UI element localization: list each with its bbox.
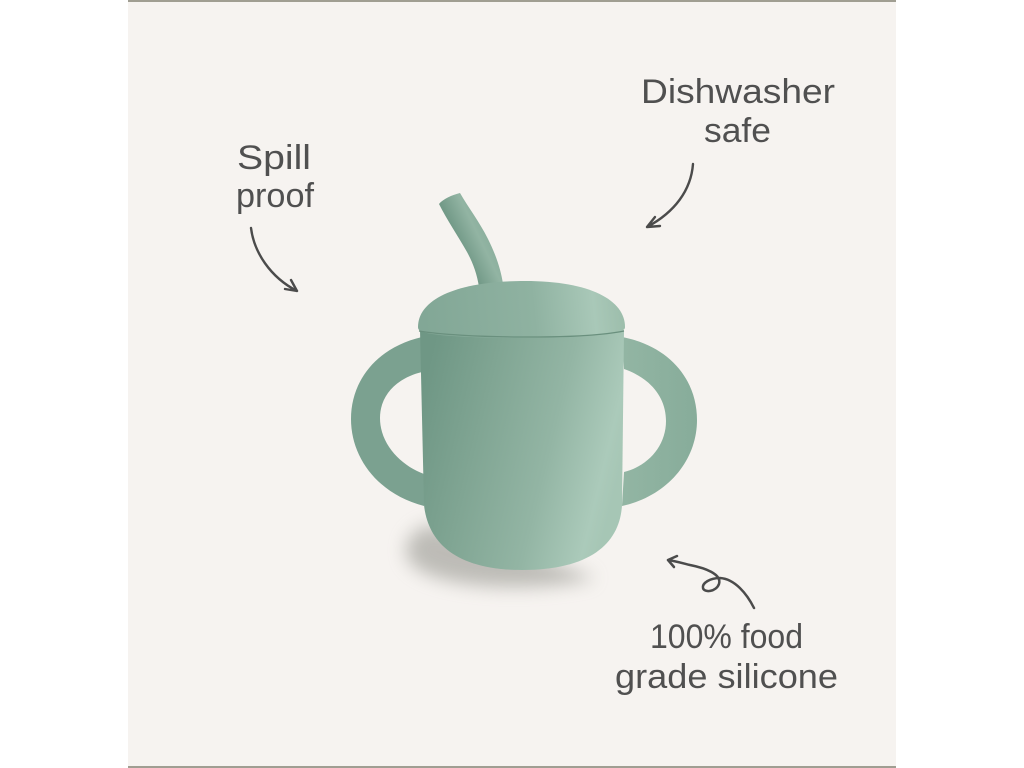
arrow: food grade silicone	[668, 556, 754, 608]
label: Dishwasher safe	[641, 73, 835, 150]
lid seam	[419, 331, 624, 337]
label: Dishwasher safe: Dishwasher	[641, 73, 835, 111]
label: Dishwasher safe: safe	[704, 112, 771, 150]
label: 100% food grade silicone	[615, 618, 838, 696]
straw	[439, 193, 503, 287]
arrow: Dishwasher safe	[647, 164, 693, 227]
lid	[418, 281, 625, 338]
product: two-handled sippy cup with straw	[351, 193, 697, 587]
label: 100% food grade silicone: grade silicone	[615, 658, 838, 696]
cup shadow	[406, 525, 596, 587]
label: Spill proof: proof	[236, 177, 315, 215]
label: Spill proof: Spill	[237, 139, 311, 177]
right handle	[622, 337, 697, 506]
arrow: Spill proof	[251, 228, 297, 291]
panel: background	[128, 0, 896, 768]
label: Spill proof	[236, 139, 315, 215]
cup body	[420, 330, 624, 570]
left handle	[351, 337, 424, 506]
label: 100% food grade silicone: 100% food	[650, 618, 803, 656]
